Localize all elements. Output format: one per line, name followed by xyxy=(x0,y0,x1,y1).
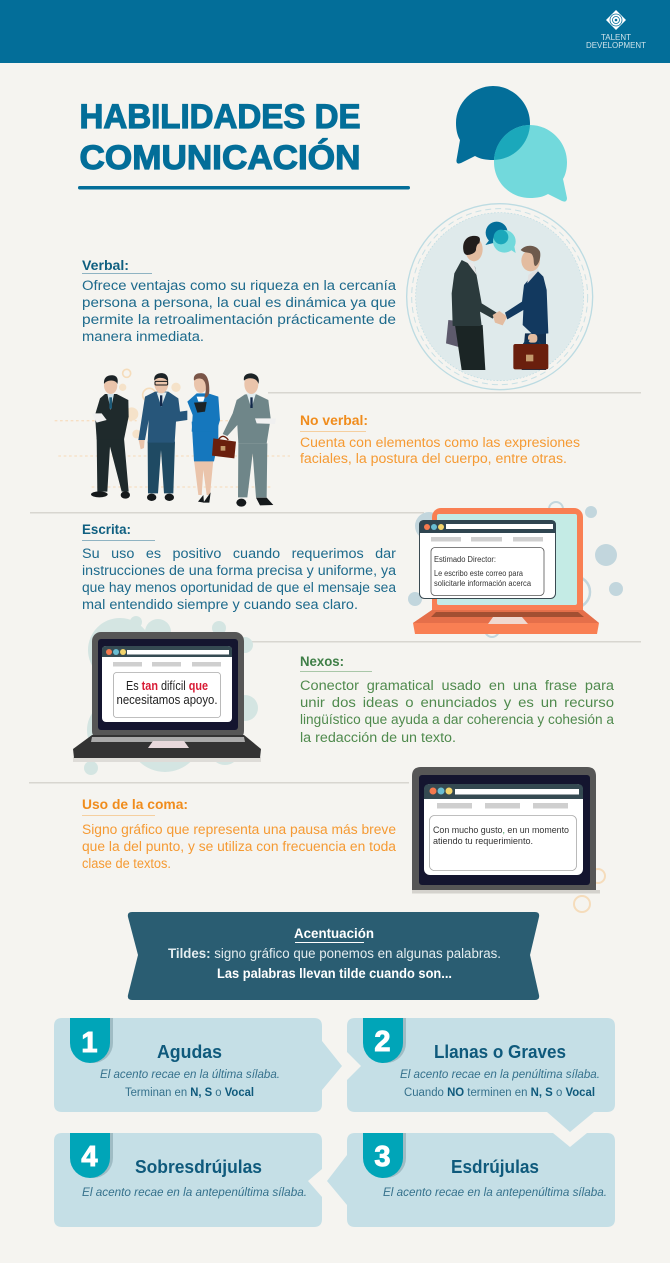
text: nexos example xyxy=(116,679,218,707)
text: verbal description: Ofrece ventajas como su riqueza en la cercanía xyxy=(82,278,397,293)
heading: Escrita xyxy=(82,522,155,541)
text: coma description: Signo gráfico que representa una pausa más breve xyxy=(82,822,396,837)
text: no verbal description: Cuenta con elementos como las expresiones xyxy=(300,435,580,450)
card 2: llanas o graves: Cuando NO terminen en N, S o Vocal xyxy=(404,1087,595,1099)
text: escrita description: que hay menos oportunidad de que el mensaje sea xyxy=(82,580,397,595)
text: escrita description: mal entendido siempre y cuando sea claro. xyxy=(82,597,358,612)
divider xyxy=(245,641,641,642)
panel: verbal xyxy=(82,258,397,344)
illustration: laptop screen with comma example xyxy=(412,767,605,912)
badge 4: 4 xyxy=(81,1141,98,1173)
badge 1 xyxy=(70,1018,113,1063)
badge 2: 2 xyxy=(374,1026,391,1058)
text: escrita description: instrucciones de una forma precisa y uniforme, ya xyxy=(82,563,397,578)
title: COMUNICACIÓN xyxy=(80,137,360,177)
text: no verbal description: faciales, la postura del cuerpo, entre otras. xyxy=(300,451,567,466)
heading: Escrita: Escrita: xyxy=(82,522,131,537)
divider xyxy=(30,512,424,514)
illustration: handshake xyxy=(407,204,593,390)
window: email: Le escribo este correo para xyxy=(434,569,523,578)
heading: Verbal: Verbal: xyxy=(82,258,129,273)
text: tildes definition: Tildes: signo gráfico que ponemos en algunas palabras. xyxy=(168,946,501,961)
card 3: esdrújulas xyxy=(327,1133,615,1227)
badge 3: 3 xyxy=(374,1141,391,1173)
text: verbal description: permite la retroalimentación prácticamente de xyxy=(82,312,396,327)
heading: Nexos xyxy=(300,654,372,672)
icon: speech bubbles xyxy=(456,86,567,202)
badge 4 xyxy=(70,1133,113,1178)
card 1: agudas: Terminan en N, S o Vocal xyxy=(125,1087,254,1099)
text: coma description: que la del punto, y se utiliza con frecuencia en toda xyxy=(82,839,396,854)
divider xyxy=(29,782,409,784)
title: HABILIDADES DE xyxy=(80,98,360,136)
panel: escrita xyxy=(82,522,397,612)
card 2: llanas o graves xyxy=(347,1018,615,1132)
heading: Nexos: Nexos: xyxy=(300,654,344,669)
card 1: agudas: El acento recae en la última sílaba. xyxy=(100,1069,280,1081)
text: escrita description: Su uso es positivo cuando requerimos dar xyxy=(82,546,397,561)
icon: Talent Development logo xyxy=(586,10,646,50)
badge 3 xyxy=(363,1133,406,1178)
illustration: orange laptop with email xyxy=(408,502,623,637)
badge 1: 1 xyxy=(81,1027,98,1059)
text: comma example: atiendo tu requerimiento. xyxy=(433,836,533,847)
icon: Talent Development logo: TALENT xyxy=(601,33,631,42)
text: verbal description xyxy=(82,278,397,344)
banner: acentuación xyxy=(128,912,539,1000)
card 4: sobresdrújulas: El acento recae en la antepenúltima sílaba. xyxy=(82,1187,307,1199)
card 3: esdrújulas: Esdrújulas xyxy=(451,1157,539,1177)
heading: Verbal xyxy=(82,258,152,274)
header band xyxy=(0,0,670,63)
window: email xyxy=(419,520,556,598)
title xyxy=(78,98,410,190)
panel: nexos xyxy=(300,654,615,745)
card 1: agudas: Agudas xyxy=(157,1042,222,1062)
text: escrita description xyxy=(82,546,397,612)
heading: Acentuación: Acentuación xyxy=(294,926,374,941)
window: email: Estimado Director: xyxy=(434,555,496,564)
illustration: group of four professionals xyxy=(55,369,290,507)
text: coma description: clase de textos. xyxy=(82,856,171,871)
card 2: llanas o graves: Llanas o Graves xyxy=(434,1042,566,1062)
card 1: agudas xyxy=(54,1018,342,1112)
text: comma example xyxy=(433,825,569,847)
text: verbal description: manera inmediata. xyxy=(82,329,204,344)
text: nexos description: la redacción de un texto. xyxy=(300,730,456,745)
window: email: solicitarle información acerca xyxy=(434,579,532,588)
icon: Talent Development logo: DEVELOPMENT xyxy=(586,41,646,50)
heading: Uso de la coma: Uso de la coma: xyxy=(82,797,188,812)
text: nexos description: lingüístico que ayuda a dar coherencia y cohesión a xyxy=(300,712,614,727)
panel: uso de la coma xyxy=(82,797,396,871)
text: nexos example: necesitamos apoyo. xyxy=(116,693,218,707)
text: nexos description: Conector gramatical usado en una frase para xyxy=(300,678,615,693)
text: nexos description: unir dos ideas o enunciados y es un recurso xyxy=(300,695,614,710)
divider xyxy=(268,392,641,394)
card 2: llanas o graves: El acento recae en la penúltima sílaba. xyxy=(400,1069,600,1081)
text: coma description xyxy=(82,822,396,871)
card 4: sobresdrújulas: Sobresdrújulas xyxy=(135,1157,262,1177)
badge 2 xyxy=(363,1018,406,1063)
text: comma example: Con mucho gusto, en un momento xyxy=(433,825,569,836)
illustration: dark laptop with nexos example xyxy=(73,616,261,775)
text: nexos description xyxy=(300,678,615,745)
text: no verbal description xyxy=(300,435,580,466)
panel: no verbal xyxy=(300,413,580,466)
heading: No verbal: No verbal: xyxy=(300,413,368,428)
text: nexos example: Es tan difícil que xyxy=(126,679,208,693)
text: verbal description: persona a persona, la cual es dinámica ya que xyxy=(82,295,396,310)
text: lead-in: Las palabras llevan tilde cuando son... xyxy=(217,966,452,981)
card 4: sobresdrújulas xyxy=(54,1133,322,1227)
card 3: esdrújulas: El acento recae en la antepenúltima sílaba. xyxy=(383,1187,607,1199)
